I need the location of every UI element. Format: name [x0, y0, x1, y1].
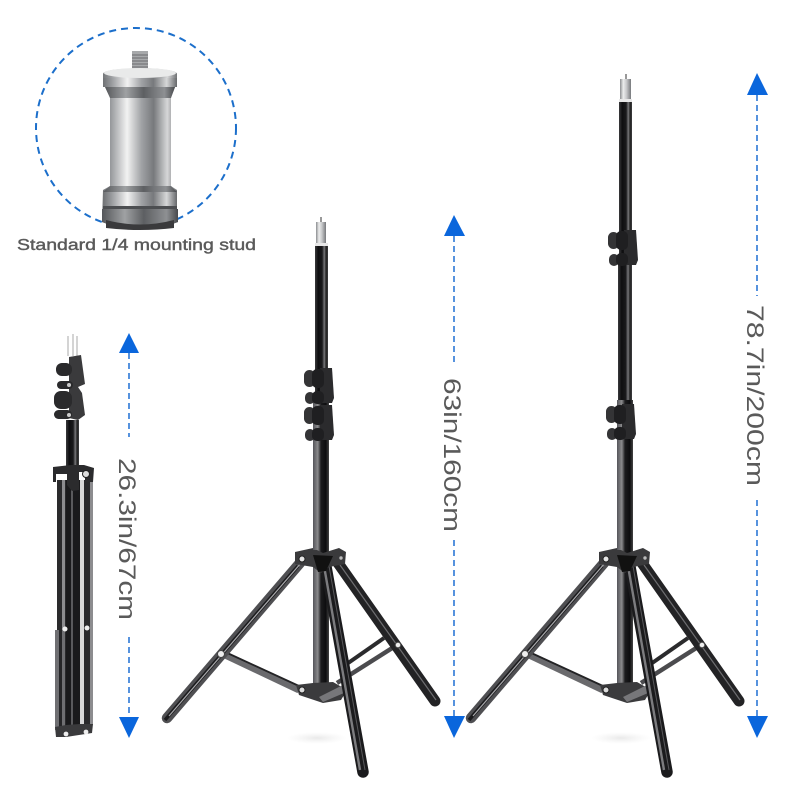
medium tripod [165, 217, 436, 772]
clamps [608, 230, 638, 266]
label: 26.3in/67cm: 26.3in/67cm [113, 458, 140, 620]
tall tripod [469, 74, 740, 772]
label: 63in/160cm: 63in/160cm [438, 378, 465, 532]
leg bundle [57, 480, 66, 730]
centre pole [66, 420, 79, 470]
clamps [304, 368, 334, 404]
arrow: 63in height [444, 215, 465, 738]
top hub [53, 465, 94, 491]
joints [62, 626, 68, 632]
silver tip [620, 79, 631, 100]
arrow: 78.7in height [747, 73, 768, 738]
dashed detail circle [36, 28, 236, 228]
pole [315, 245, 328, 550]
pole [619, 102, 632, 402]
label: 78.7in/200cm: 78.7in/200cm [741, 305, 768, 486]
icon: mounting stud [102, 51, 178, 230]
upper clamps [69, 355, 85, 420]
caption: Standard 1/4 mounting stud [17, 237, 256, 254]
silver tip [316, 222, 326, 244]
arrow: 26.3in height [119, 333, 139, 738]
folded tripod [53, 334, 94, 737]
panel: mounting stud callout [17, 28, 256, 254]
foot [55, 724, 93, 737]
